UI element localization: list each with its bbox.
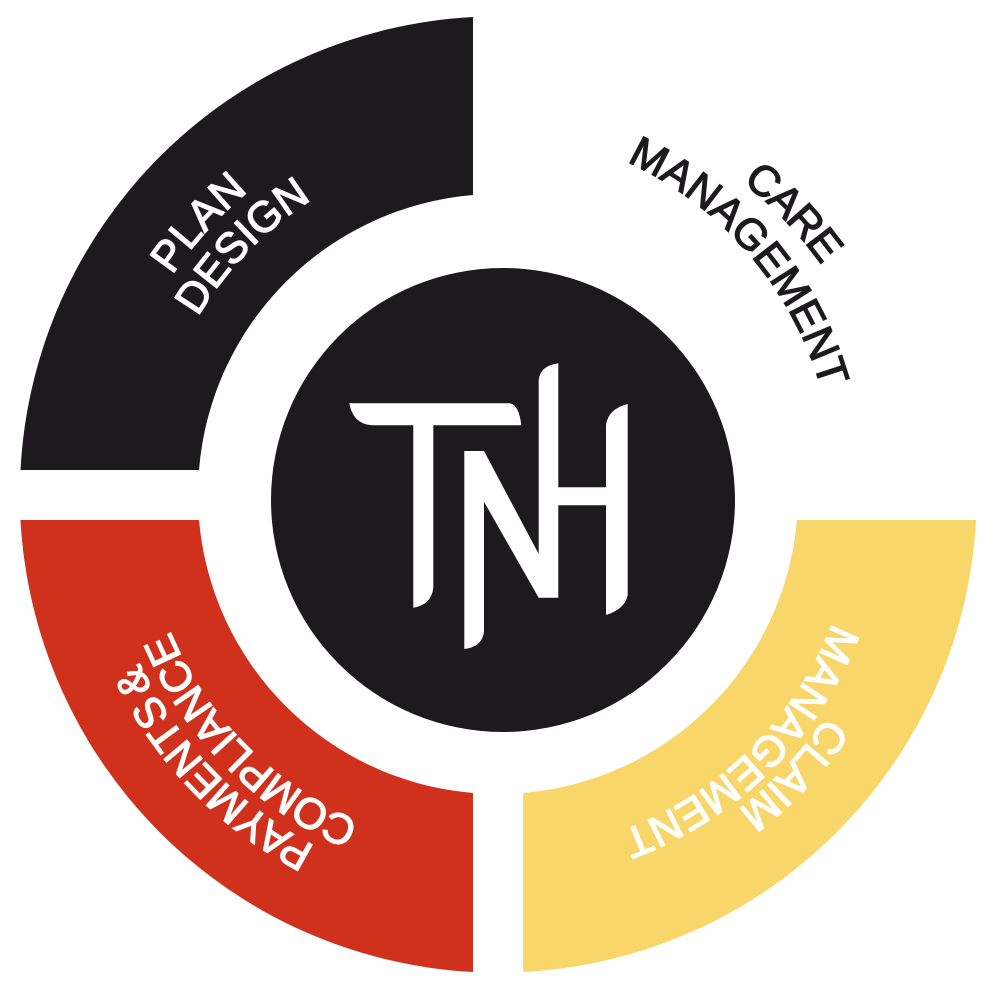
segment: payments and compliance [20, 520, 473, 972]
label: payments and compliance: PAYMENTS& [118, 662, 313, 872]
segment: claim management [523, 520, 976, 972]
logo: TNH monogram [349, 363, 628, 649]
label: claim management: CLAIM [740, 722, 845, 832]
label: care management: MANAGEMENT [629, 136, 850, 380]
segment: plan design [20, 17, 473, 470]
label: claim management: MANAGEMENT [630, 625, 860, 860]
label: care management: CARE [748, 165, 845, 264]
label: payments and compliance: COMPLIANCE [143, 632, 354, 844]
segment: care management [629, 136, 850, 380]
label: plan design: PLAN [149, 170, 246, 274]
label: plan design: DESIGN [174, 176, 310, 315]
center circle [271, 268, 735, 732]
